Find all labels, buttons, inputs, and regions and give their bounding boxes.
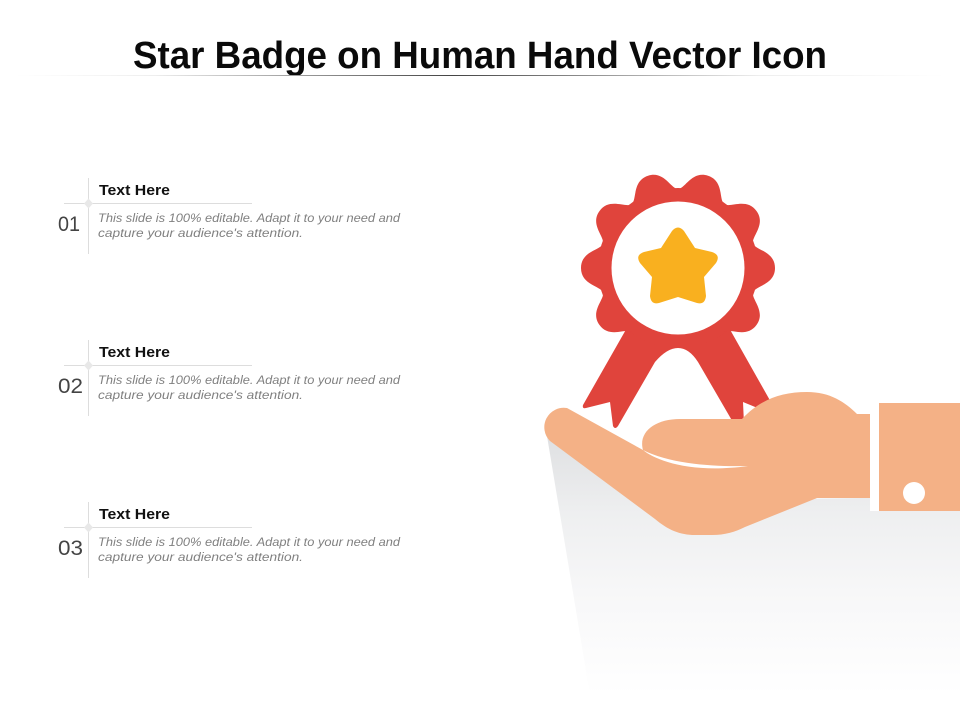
description 03: This slide is 100% editable. Adapt it to your need and [98,537,401,549]
icon: star [638,228,718,303]
list item 02 [58,340,401,416]
icon: shirt cuff [870,403,960,511]
description 03: capture your audience's attention. [98,552,303,564]
description 02: This slide is 100% editable. Adapt it to your need and [98,375,401,387]
heading 03: Text Here [99,507,170,523]
number 01: 01 [58,213,80,236]
white disc [612,202,744,334]
number 03: 03 [58,537,83,560]
description 01 [98,213,401,240]
description 01: This slide is 100% editable. Adapt it to your need and [98,213,401,225]
list item 03 [58,502,401,578]
hand shadow [547,436,960,695]
cuff button [903,482,925,504]
ribbon tails [583,326,772,428]
number 02: 02 [58,375,83,398]
title: Star Badge on Human Hand Vector Icon [133,35,827,77]
heading 01: Text Here [99,183,170,199]
scalloped medal [575,165,781,348]
finger crease [643,450,748,468]
icon: hand [544,392,870,535]
heading 02: Text Here [99,345,170,361]
list item 01 [58,178,401,254]
description 03 [98,537,401,564]
description 02 [98,375,401,402]
icon: ribbon badge [575,165,781,428]
description 02: capture your audience's attention. [98,390,303,402]
description 01: capture your audience's attention. [98,228,303,240]
